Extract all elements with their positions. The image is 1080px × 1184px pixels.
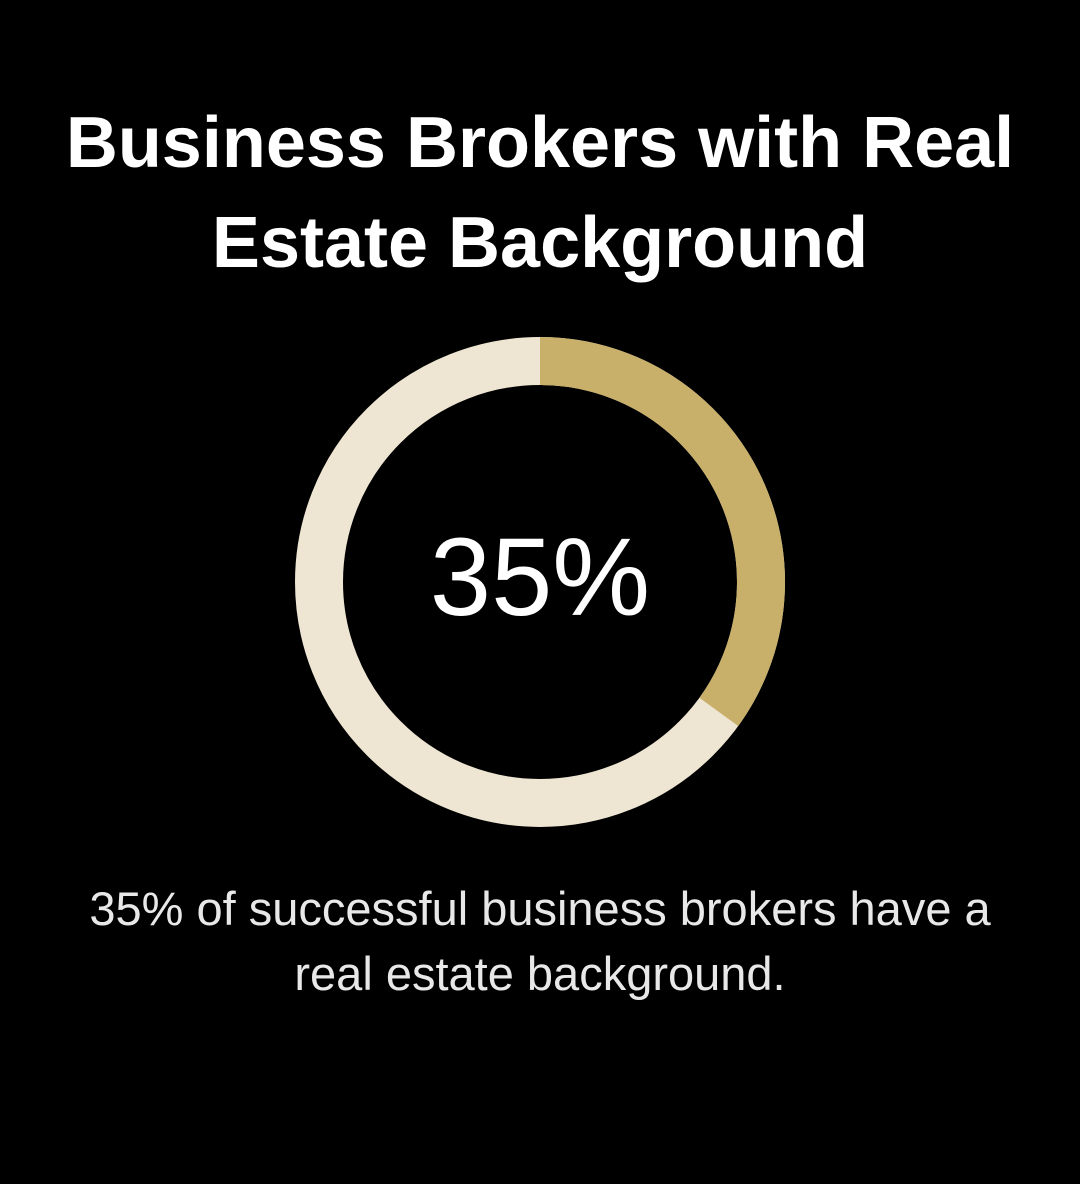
title (66, 103, 1014, 283)
donut chart (295, 337, 785, 827)
title: Business Brokers with Real (66, 103, 1014, 183)
title: Estate Background (212, 203, 868, 283)
caption: 35% of successful business brokers have a (89, 882, 991, 935)
donut track (319, 361, 761, 803)
caption (89, 882, 991, 1000)
center value: 35% (430, 516, 650, 639)
caption: real estate background. (294, 947, 786, 1000)
donut segment 35% (540, 361, 761, 712)
